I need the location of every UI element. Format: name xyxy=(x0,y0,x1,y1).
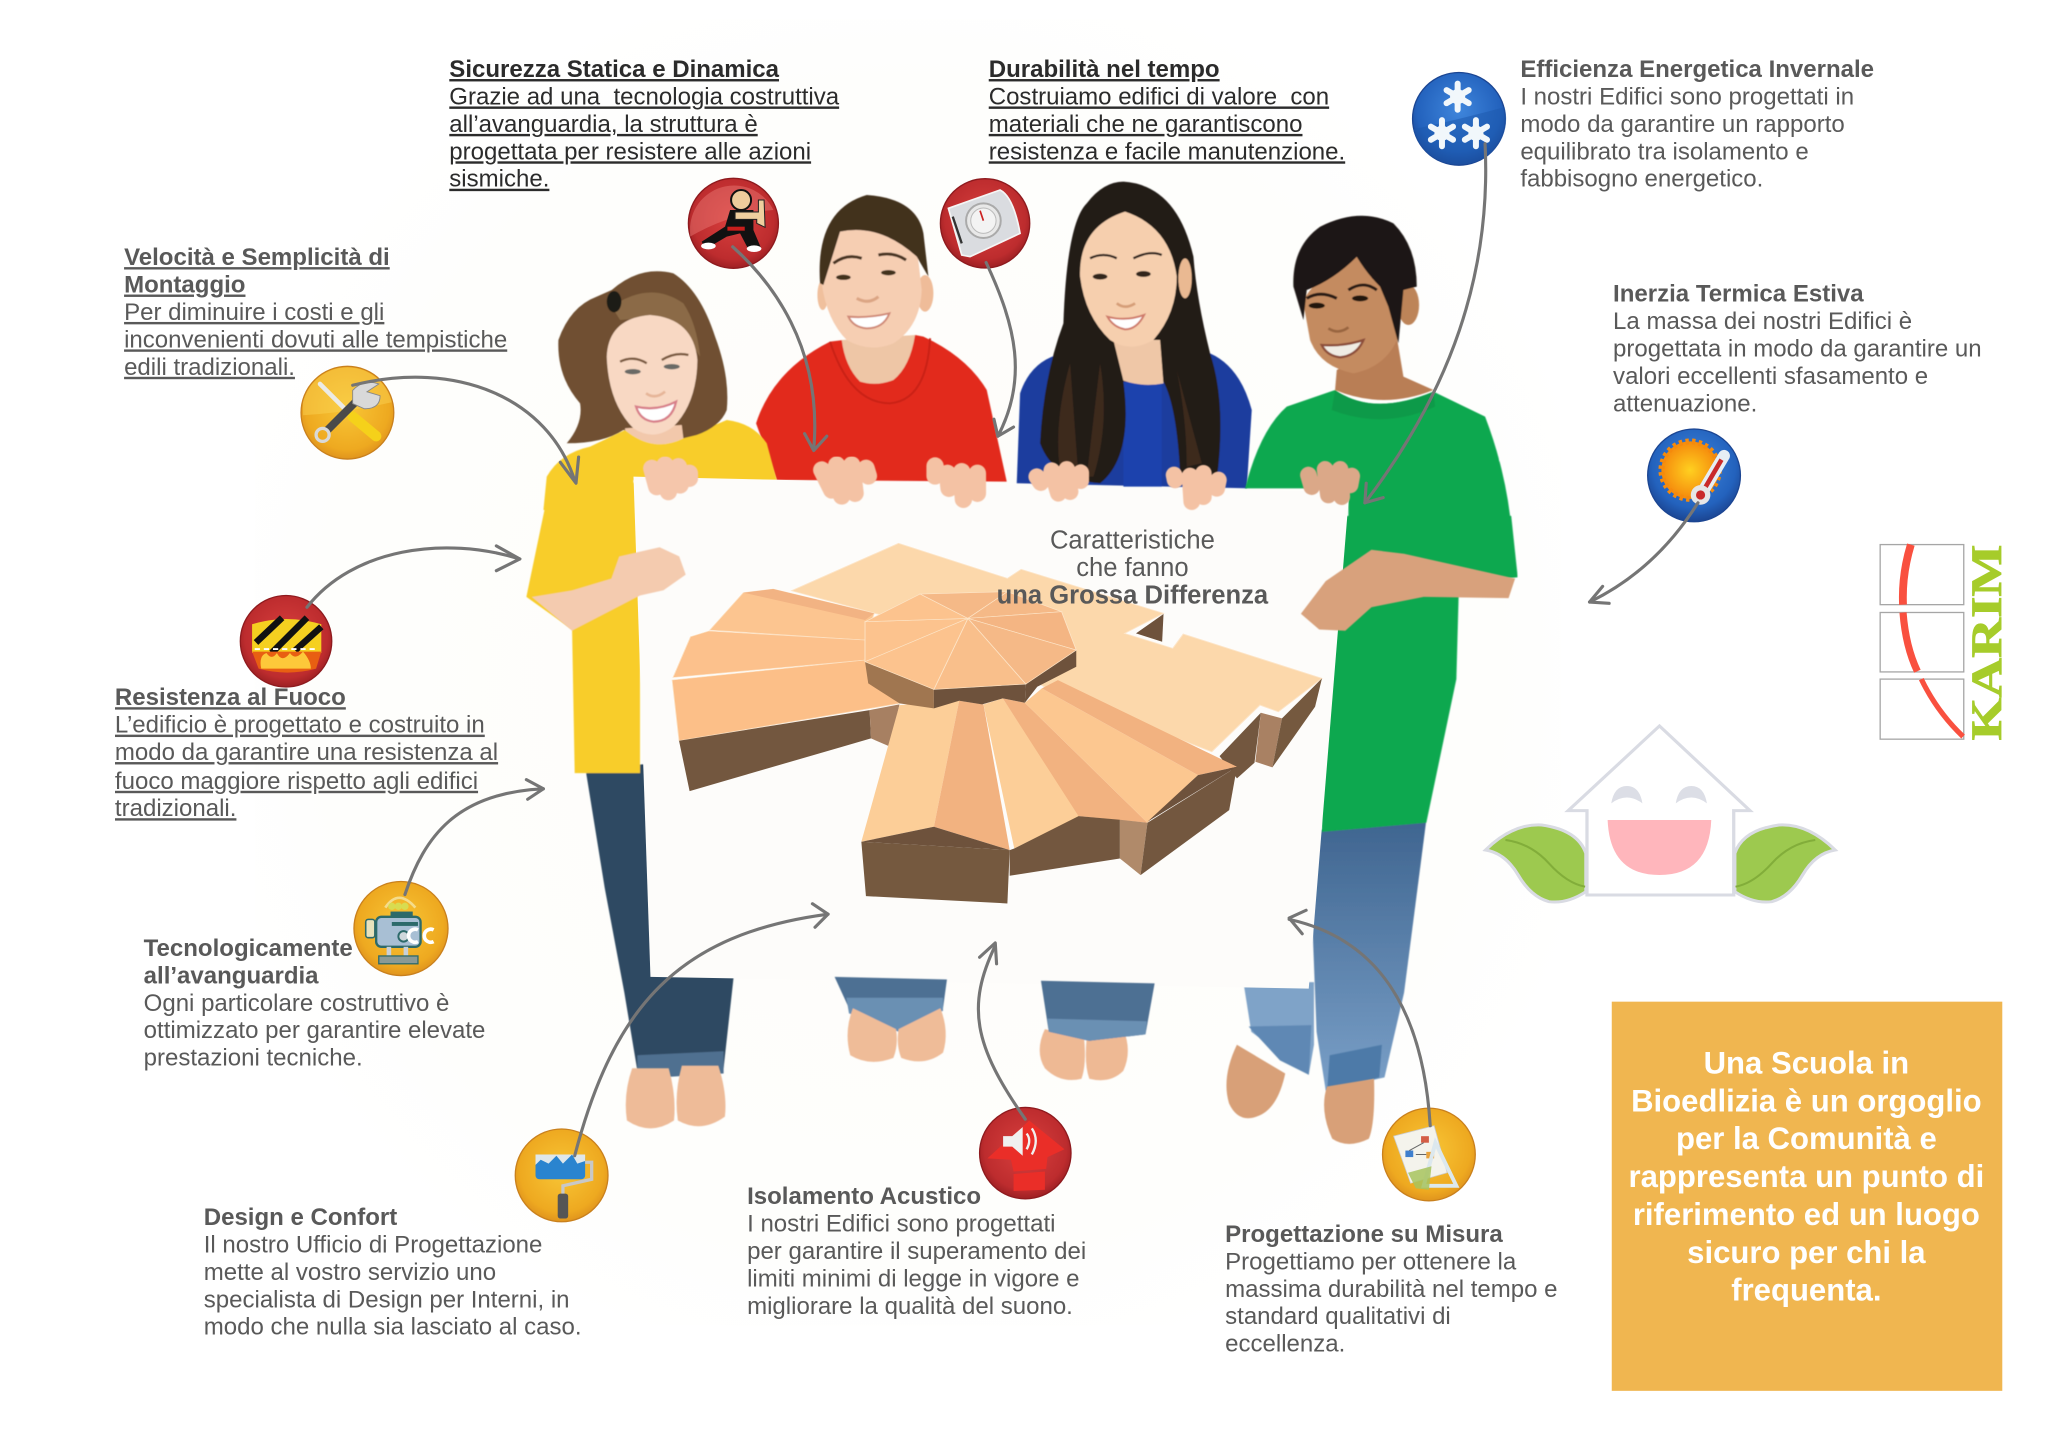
logo: KARIM: KARIM xyxy=(1964,545,2011,740)
icon: sound arrow xyxy=(980,1107,1071,1199)
hands: boy in green xyxy=(1308,469,1352,497)
text: Isolamento Acustico xyxy=(747,1183,1086,1320)
text: Tecnologicamente all'avanguardia: Ogni particolare costruttivo è xyxy=(144,990,449,1017)
text: Sicurezza Statica e Dinamica: all’avanguardia, la struttura è xyxy=(449,111,758,138)
text: Resistenza al Fuoco: tradizionali. xyxy=(115,795,236,822)
hands: girl in yellow xyxy=(652,465,689,492)
building 3D model xyxy=(672,543,1322,903)
icon: paint roller xyxy=(515,1129,608,1222)
illustration: four children holding the board xyxy=(526,182,1518,1144)
callout: orange panel: Bioedlizia è un orgoglio xyxy=(1631,1083,1982,1118)
text: Velocità e Semplicità di Montaggio: edili tradizionali. xyxy=(124,354,295,381)
arm and hand: boy in green xyxy=(1301,550,1515,631)
child: girl in yellow shirt xyxy=(526,271,777,1079)
left wing xyxy=(710,589,874,640)
icon: fire resistance xyxy=(240,596,332,687)
board caption: Caratteristiche xyxy=(1050,527,1215,555)
feet and jeans: boy in red xyxy=(835,977,947,1062)
text: Progettazione su Misura: Progettazione su Misura xyxy=(1225,1221,1503,1248)
board caption: che fanno xyxy=(1076,554,1189,582)
central dome facets xyxy=(865,592,1076,689)
text: Isolamento Acustico: Isolamento Acustico xyxy=(747,1183,981,1210)
text: Progettazione su Misura: Progettiamo per ottenere la xyxy=(1225,1248,1517,1275)
house outline xyxy=(1568,726,1750,895)
feet: girl in yellow xyxy=(626,1066,725,1128)
arrow: acoustics to board xyxy=(978,943,1025,1119)
front fan roof xyxy=(861,701,959,842)
callout: orange panel: frequenta. xyxy=(1731,1273,1881,1308)
text: Durabilità nel tempo: Durabilità nel tempo xyxy=(989,56,1220,83)
text: Sicurezza Statica e Dinamica: progettata per resistere alle azioni xyxy=(449,138,811,165)
text: Inerzia Termica Estiva: progettata in modo da garantire un xyxy=(1613,336,1982,363)
arrow: winter efficiency to board xyxy=(1365,144,1486,503)
text: Sicurezza Statica e Dinamica: Sicurezza Statica e Dinamica xyxy=(449,56,780,83)
hands: girl in blue xyxy=(1037,469,1218,502)
text: Efficienza Energetica Invernale: equilibrato tra isolamento e xyxy=(1520,138,1809,165)
text: Durabilità nel tempo: materiali che ne garantiscono xyxy=(989,111,1302,138)
hands: boy in red xyxy=(822,465,977,499)
text: Sicurezza Statica e Dinamica: Grazie ad una tecnologia costruttiva xyxy=(449,83,840,110)
text: Tecnologicamente all'avanguardia: prestazioni tecniche. xyxy=(144,1045,363,1072)
text: Isolamento Acustico: limiti minimi di legge in vigore e xyxy=(747,1265,1079,1292)
child: boy in green shirt xyxy=(1243,216,1518,1092)
text: Resistenza al Fuoco: L’edificio è progettato e costruito in xyxy=(115,712,485,739)
callout: orange panel: per la Comunità e xyxy=(1676,1121,1937,1156)
house mouth xyxy=(1608,820,1711,875)
child: girl in blue shirt xyxy=(1017,182,1252,488)
callout: orange panel: rappresenta un punto di xyxy=(1629,1159,1984,1194)
house eyes xyxy=(1611,786,1707,803)
icon: martial arts figure xyxy=(688,178,778,268)
boy's jeans xyxy=(1243,820,1426,1092)
text: Design e Confort: mette al vostro servizio uno xyxy=(204,1259,496,1286)
children's hands on the board xyxy=(532,465,1515,631)
arrow: fire resistance to child xyxy=(307,546,520,607)
text: Inerzia Termica Estiva: valori eccellenti sfasamento e xyxy=(1613,363,1928,390)
central dome walls xyxy=(865,662,934,708)
icon: custom design drawings xyxy=(1383,1108,1475,1201)
text: Velocità e Semplicità di Montaggio: Per diminuire i costi e gli xyxy=(124,299,384,326)
text: Design e Confort: Il nostro Ufficio di Progettazione xyxy=(204,1231,542,1258)
text: Design e Confort: specialista di Design per Interni, in xyxy=(204,1286,570,1313)
icon: snowflakes xyxy=(1413,72,1506,165)
front walls xyxy=(861,827,1010,850)
panel: white board xyxy=(633,477,1349,989)
text: Durabilità nel tempo: Costruiamo edifici di valore con xyxy=(989,83,1329,110)
arrow: durability to board xyxy=(986,262,1015,436)
board caption xyxy=(997,527,1269,609)
callout: orange panel: Una Scuola in xyxy=(1704,1045,1909,1080)
arrow: summer inertia xyxy=(1590,503,1698,603)
text: Velocità e Semplicità di Montaggio xyxy=(124,244,507,381)
text: Design e Confort xyxy=(204,1204,582,1341)
text: Progettazione su Misura: massima durabilità nel tempo e xyxy=(1225,1276,1558,1303)
right leaf xyxy=(1735,825,1835,902)
text: Velocità e Semplicità di Montaggio: Velocità e Semplicità di xyxy=(124,244,390,271)
icon: robot machine xyxy=(354,882,448,976)
arm and hand: girl in yellow xyxy=(532,547,686,631)
icon: wrench and screwdriver xyxy=(301,366,394,459)
callout: orange panel: riferimento ed un luogo xyxy=(1633,1197,1980,1232)
text: Efficienza Energetica Invernale: I nostri Edifici sono progettati in xyxy=(1520,83,1854,110)
icon: sun and thermometer xyxy=(1648,429,1740,522)
feet and jeans: girl in blue xyxy=(1040,981,1155,1080)
text: Velocità e Semplicità di Montaggio: inconvenienti dovuti alle tempistiche xyxy=(124,326,507,353)
text: Durabilità nel tempo xyxy=(989,56,1345,165)
text: Durabilità nel tempo: resistenza e facile manutenzione. xyxy=(989,138,1345,165)
arrow: design to board xyxy=(575,904,828,1156)
text: Isolamento Acustico: I nostri Edifici sono progettati xyxy=(747,1211,1055,1238)
girl's jeans xyxy=(585,764,737,1079)
text: Resistenza al Fuoco: Resistenza al Fuoco xyxy=(115,684,346,711)
text: Efficienza Energetica Invernale: fabbisogno energetico. xyxy=(1520,166,1763,193)
child feet below the board xyxy=(626,977,1374,1144)
text: Tecnologicamente all'avanguardia: ottimizzato per garantire elevate xyxy=(144,1017,485,1044)
text: Efficienza Energetica Invernale: Efficienza Energetica Invernale xyxy=(1520,56,1874,83)
text: Tecnologicamente all'avanguardia xyxy=(144,935,485,1072)
text: Resistenza al Fuoco: modo da garantire una resistenza al xyxy=(115,739,498,766)
left leaf xyxy=(1486,825,1586,902)
feet: boy in green xyxy=(1226,1045,1374,1144)
text: Inerzia Termica Estiva: Inerzia Termica Estiva xyxy=(1613,281,1864,308)
text: Progettazione su Misura: standard qualitativi di xyxy=(1225,1303,1451,1330)
text: Tecnologicamente all'avanguardia: Tecnologicamente xyxy=(144,935,353,962)
text: Progettazione su Misura: eccellenza. xyxy=(1225,1331,1345,1358)
text: Resistenza al Fuoco xyxy=(115,684,498,822)
text: Resistenza al Fuoco: fuoco maggiore rispetto agli edifici xyxy=(115,768,478,795)
icon: dial gauge xyxy=(940,179,1030,268)
text: Design e Confort: Design e Confort xyxy=(204,1204,397,1231)
text: Sicurezza Statica e Dinamica: sismiche. xyxy=(449,166,549,193)
icon: smiling house with leaves xyxy=(1486,726,1835,902)
arrow: tailored design to board xyxy=(1289,910,1430,1126)
text: Inerzia Termica Estiva: La massa dei nostri Edifici è xyxy=(1613,308,1912,335)
arrow: technology to child xyxy=(405,780,543,895)
callout: orange panel: sicuro per chi la xyxy=(1687,1235,1926,1270)
callout: orange panel xyxy=(1612,1002,2002,1391)
logo: KARIM xyxy=(1880,545,2011,740)
text: Efficienza Energetica Invernale xyxy=(1520,56,1874,193)
back roof xyxy=(792,543,1322,752)
text: Velocità e Semplicità di Montaggio: Montaggio xyxy=(124,272,245,299)
text: Isolamento Acustico: migliorare la qualità del suono. xyxy=(747,1293,1073,1320)
arrow: assembly speed to child xyxy=(353,377,579,483)
text: Sicurezza Statica e Dinamica xyxy=(449,56,840,193)
text: Efficienza Energetica Invernale: modo da garantire un rapporto xyxy=(1520,111,1845,138)
text: Isolamento Acustico: per garantire il superamento dei xyxy=(747,1238,1086,1265)
text: Design e Confort: modo che nulla sia lasciato al caso. xyxy=(204,1314,582,1341)
text: Inerzia Termica Estiva xyxy=(1613,281,1982,417)
text: Tecnologicamente all'avanguardia: all’avanguardia xyxy=(144,962,319,989)
child: boy in red shirt xyxy=(756,195,1007,482)
text: Inerzia Termica Estiva: attenuazione. xyxy=(1613,390,1757,417)
arrow: structural safety to board xyxy=(733,247,827,451)
board caption: una Grossa Differenza xyxy=(997,581,1269,609)
text: Progettazione su Misura xyxy=(1225,1221,1558,1358)
